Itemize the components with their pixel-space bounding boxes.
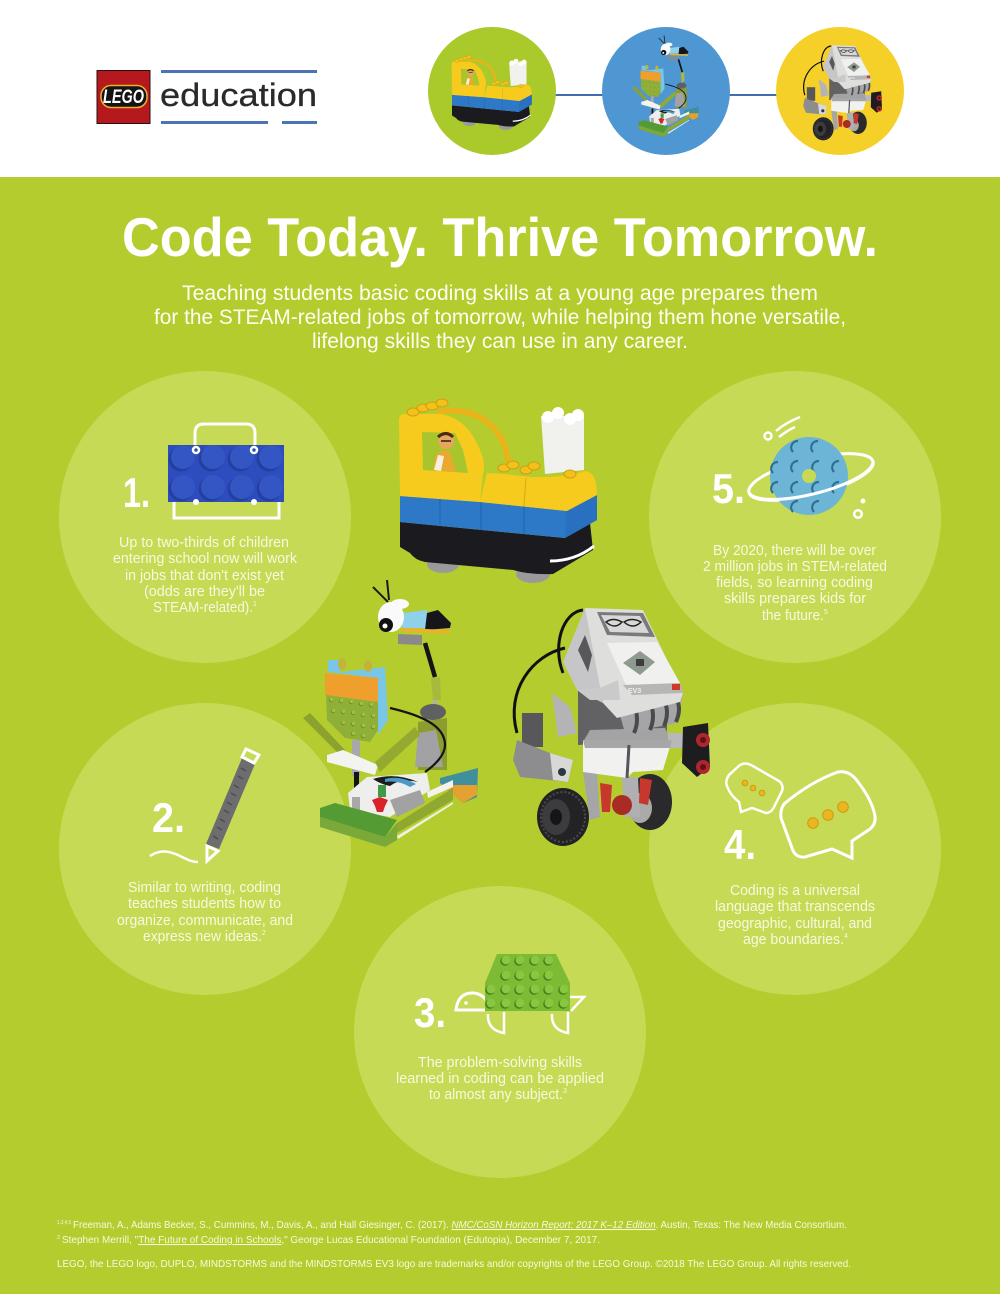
text: writing: teaches students how to — [128, 896, 281, 912]
footnotes — [57, 1219, 851, 1270]
text: problem solving — [396, 1055, 604, 1103]
logo: LEGO education — [97, 70, 317, 124]
footnotes: Stephen Merrill, "The Future of Coding in Schools," George Lucas Educational Foundation (Edutopia), December 7, 2017. — [62, 1234, 600, 1246]
model: bird on a flower — [303, 580, 478, 847]
text: writing: 2 — [262, 930, 266, 937]
header circle: blue with bird model — [602, 27, 730, 155]
text: STEM jobs: the future. — [762, 608, 824, 624]
text: STEM jobs: 5 — [824, 609, 828, 616]
model: yellow and blue train — [399, 399, 597, 583]
text: universal language: language that transcends — [715, 899, 875, 915]
model: EV3 robot: EV3 — [628, 688, 641, 695]
footnotes: 1,3,4,5 — [57, 1220, 71, 1226]
footnotes: LEGO, the LEGO logo, DUPLO, MINDSTORMS and the MINDSTORMS EV3 logo are trademarks and/or copyrights of the LEGO Group. ©2018 The LEGO Group. All rights reserved. — [57, 1258, 851, 1270]
header connector line — [550, 94, 780, 96]
header circle: yellow with robot — [776, 27, 904, 155]
text: STEM jobs: skills prepares kids for — [724, 591, 866, 607]
panel: 3 problem solving — [354, 886, 646, 1178]
logo: LEGO red square: LEGO — [103, 87, 144, 108]
icon: brick pencil — [150, 749, 259, 862]
number 2: 2. — [152, 794, 185, 841]
text: universal language: geographic, cultural, and — [718, 916, 872, 932]
number 3: 3. — [414, 989, 446, 1036]
panel: 4 universal language — [649, 703, 941, 995]
icon: turtle plate — [456, 954, 584, 1033]
text: writing: Similar to writing, coding — [128, 880, 281, 896]
icon: speech bubbles — [726, 764, 875, 858]
intro paragraph: for the STEAM-related jobs of tomorrow, while helping them hone versatile, — [154, 306, 846, 329]
number 5: 5. — [712, 465, 745, 512]
text: new jobs: (odds are they'll be — [144, 584, 265, 600]
text: new jobs: STEAM-related). — [153, 600, 253, 616]
text: new jobs: entering school now will work — [113, 551, 298, 567]
number 1: 1. — [123, 469, 150, 516]
text: new jobs: 1 — [253, 601, 257, 608]
text: writing: express new ideas. — [143, 929, 262, 945]
header circle: green with train — [428, 27, 556, 155]
panel: 1 new jobs — [59, 371, 351, 663]
text: new jobs — [113, 535, 298, 616]
footnotes: Freeman, A., Adams Becker, S., Cummins, M., Davis, A., and Hall Giesinger, C. (2017). NMC/CoSN Horizon Report: 2017 K–12 Edition. Austin, Texas: The New Media Consortium. — [73, 1219, 847, 1231]
model: EV3 robot — [513, 608, 710, 846]
intro paragraph: lifelong skills they can use in any career. — [312, 330, 688, 353]
text: problem solving: 3 — [563, 1088, 567, 1095]
text: new jobs: Up to two-thirds of children — [119, 535, 289, 551]
logo wordmark: education — [160, 77, 317, 113]
text: problem solving: learned in coding can be applied — [396, 1071, 604, 1087]
text: problem solving: to almost any subject. — [429, 1087, 563, 1103]
text: new jobs: in jobs that don't exist yet — [125, 568, 284, 584]
text: universal language — [715, 883, 875, 948]
icon: blue brick with handle — [168, 424, 284, 518]
text: STEM jobs — [703, 543, 887, 624]
intro paragraph: Teaching students basic coding skills at a young age prepares them — [182, 282, 818, 305]
text: STEM jobs: 2 million jobs in STEM-related — [703, 559, 887, 575]
logo: LEGO red square — [97, 70, 150, 124]
icon: planet plate with ring — [745, 417, 877, 518]
panel: 5 STEM jobs — [649, 371, 941, 663]
footnotes: 2 — [57, 1235, 60, 1241]
text: STEM jobs: fields, so learning coding — [716, 575, 873, 591]
logo rules — [161, 70, 317, 124]
text: universal language: age boundaries. — [743, 932, 844, 948]
number 4: 4. — [724, 821, 756, 868]
text: universal language: 4 — [844, 933, 848, 940]
intro paragraph — [154, 282, 846, 353]
text: writing: organize, communicate, and — [117, 913, 293, 929]
title: Code Today. Thrive Tomorrow. — [122, 206, 878, 268]
text: STEM jobs: By 2020, there will be over — [713, 543, 876, 559]
text: universal language: Coding is a universal — [730, 883, 860, 899]
panel: 2 writing — [59, 703, 351, 995]
text: writing — [117, 880, 293, 945]
text: problem solving: The problem-solving skills — [418, 1055, 582, 1071]
